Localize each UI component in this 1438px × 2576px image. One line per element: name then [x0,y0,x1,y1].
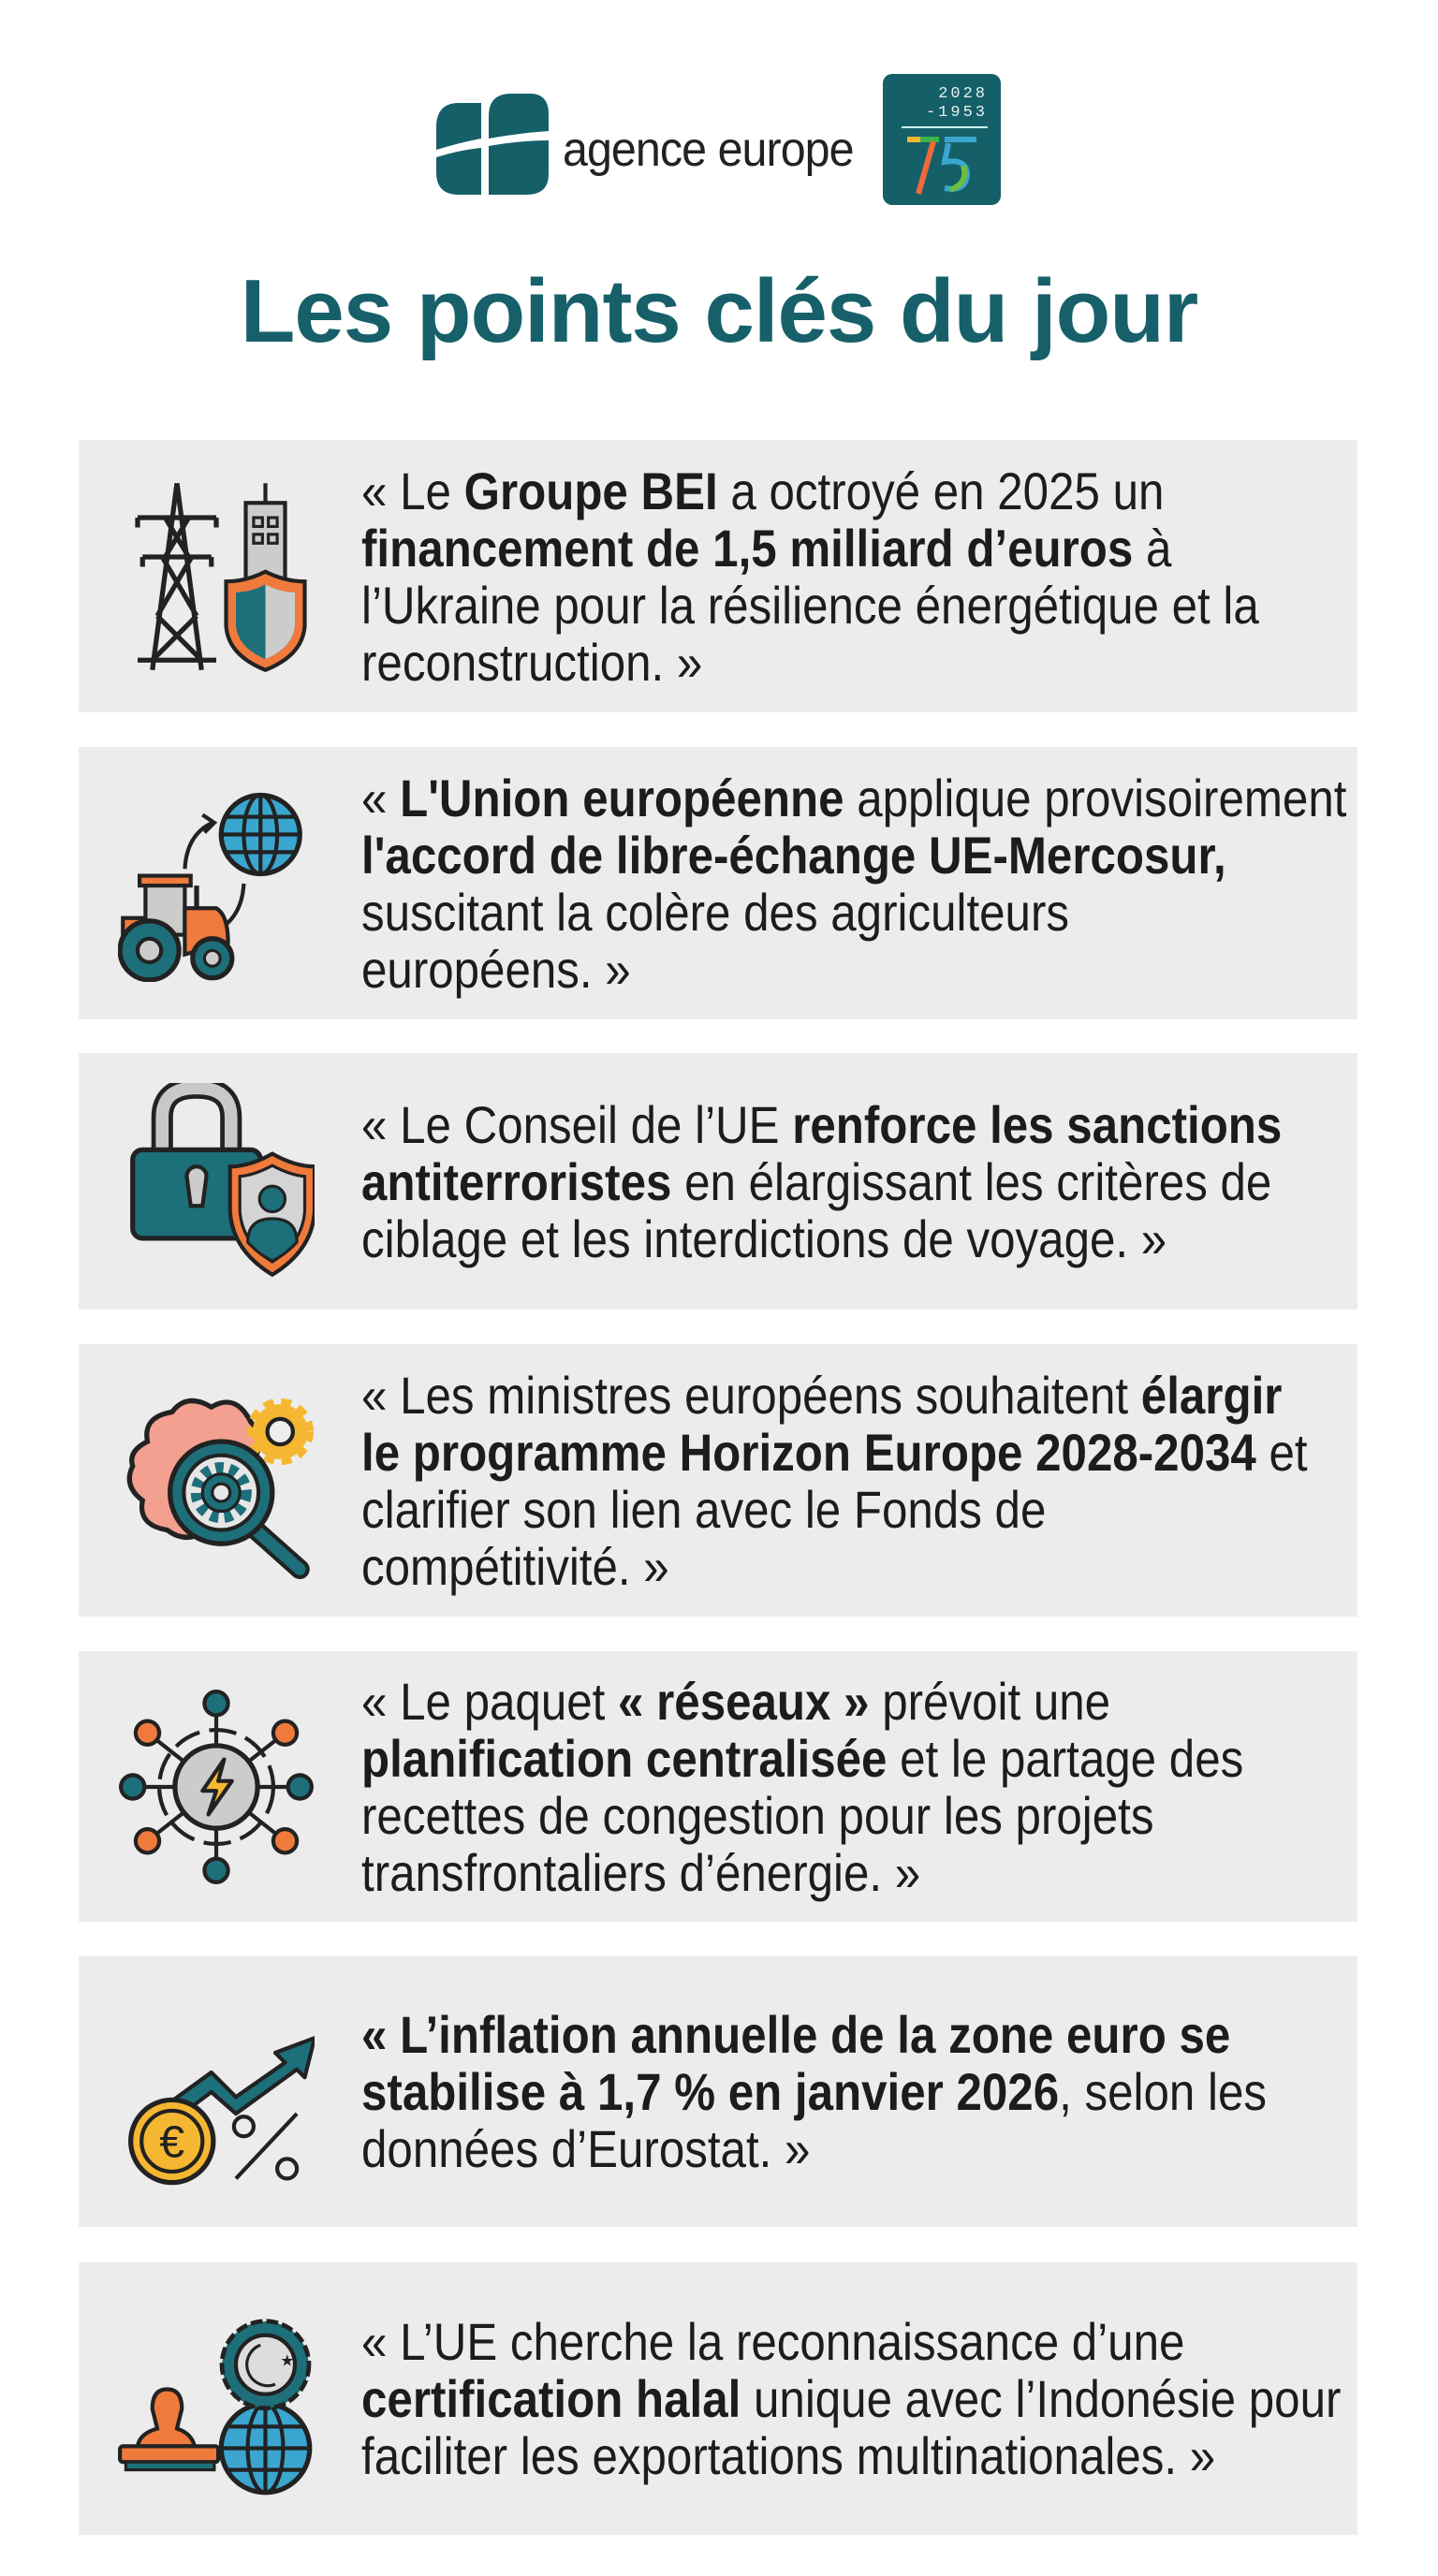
panel: BEI Ukraine [79,440,1357,712]
text block [361,768,1346,998]
text block [361,2005,1267,2178]
panel: Horizon Europe [79,1344,1357,1617]
text block [361,461,1259,691]
panel: inflation [79,1956,1357,2227]
title: Les points clés du jour [241,261,1197,361]
text block: stabilise à 1,7 % en janvier 2026, selon les [361,2062,1267,2121]
panel: sanctions [79,1053,1357,1310]
icon: pylon and shield [135,483,307,672]
text block [361,1365,1308,1595]
text block: « Le Conseil de l’UE renforce les sanctions [361,1095,1282,1153]
icon: padlock and shield [130,1083,315,1277]
text block [361,2312,1341,2485]
icon: stamp and globe with halal seal [118,2319,313,2496]
text block: l'accord de libre-échange UE-Mercosur, [361,826,1226,884]
icon: stamp and globe with halal seal: ★ [280,2350,294,2369]
text block: reconstruction. » [361,633,702,691]
text block: « L’UE cherche la reconnaissance d’une [361,2312,1184,2371]
text block [361,1095,1282,1267]
icon: euro coin, arrow and percent: € [159,2116,184,2167]
75 years badge [883,74,1001,205]
text block: « L’inflation annuelle de la zone euro se [361,2005,1230,2064]
75 years badge: 2028 [938,85,988,103]
text block: « Le paquet « réseaux » prévoit une [361,1672,1110,1730]
text block: l’Ukraine pour la résilience énergétique et la [361,575,1259,635]
text block: le programme Horizon Europe 2028-2034 et [361,1423,1308,1481]
icon: tractor and globe [118,792,302,982]
text block: certification halal unique avec l’Indonésie pour [361,2369,1341,2428]
text block: « Le Groupe BEI a octroyé en 2025 un [361,461,1164,520]
text block: transfrontaliers d’énergie. » [361,1842,920,1902]
text block: « Les ministres européens souhaitent élargir [361,1365,1282,1425]
panel: réseaux [79,1651,1357,1922]
logo text: agence europe [563,123,854,177]
text block: suscitant la colère des agriculteurs [361,882,1069,942]
panel: halal [79,2262,1357,2535]
text block: financement de 1,5 milliard d’euros à [361,519,1171,577]
panel: Mercosur [79,747,1357,1019]
icon: brain, gear and magnifier [127,1398,314,1579]
text block: faciliter les exportations multinationales. » [361,2426,1215,2485]
icon: euro coin, arrow and percent [128,2036,315,2185]
text block: données d’Eurostat. » [361,2119,810,2178]
75 years badge: -1953 [926,104,988,122]
text block: ciblage et les interdictions de voyage. » [361,1209,1167,1267]
text block: européens. » [361,940,631,998]
logo mark [436,94,549,195]
text block: antiterroristes en élargissant les critères de [361,1151,1271,1211]
text block [361,1672,1243,1902]
text block: recettes de congestion pour les projets [361,1786,1153,1844]
icon: energy network [119,1690,314,1884]
text block: clarifier son lien avec le Fonds de [361,1479,1046,1539]
logo: agence europe [436,74,1001,205]
text block: planification centralisée et le partage des [361,1728,1243,1788]
text block: « L'Union européenne applique provisoirement [361,768,1346,827]
text block: compétitivité. » [361,1537,669,1595]
